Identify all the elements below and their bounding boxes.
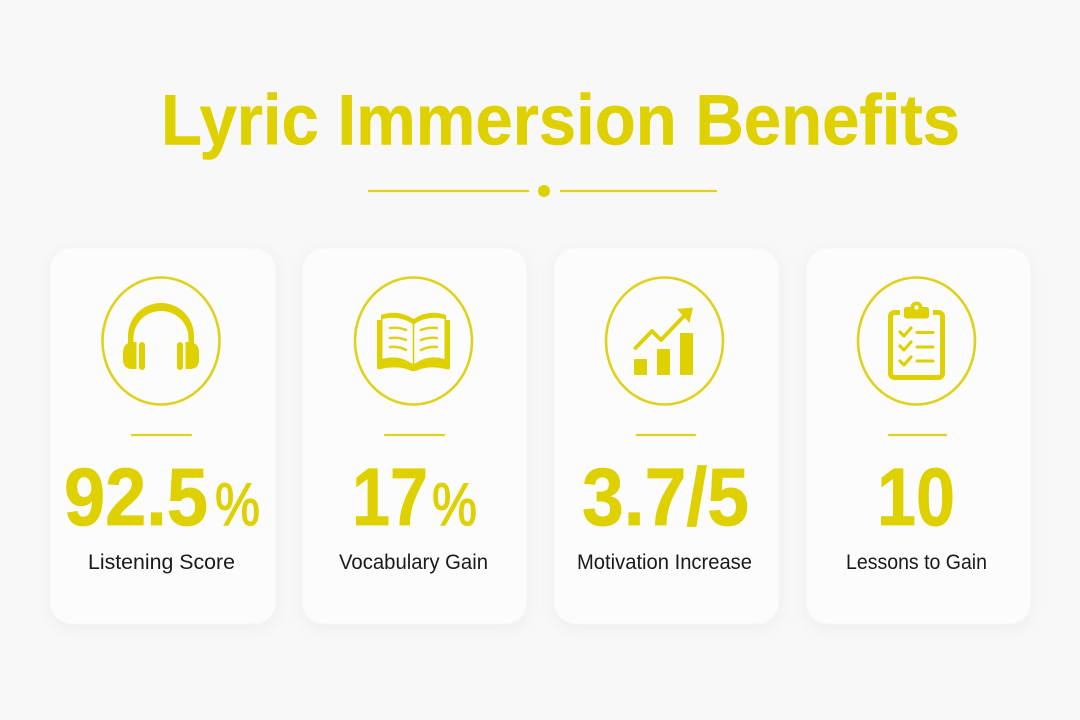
panel: listening score: [50, 248, 276, 624]
label: listening score: Listening Score: [88, 550, 235, 574]
label: motivation increase: Motivation Increase: [577, 550, 752, 574]
label: vocabulary gain: Vocabulary Gain: [339, 550, 488, 574]
stat: 10: 10: [877, 452, 955, 543]
stat: 92.5%: 92.5: [64, 452, 208, 543]
panel: vocabulary gain: %: [432, 471, 477, 538]
icon: headphones: [102, 278, 220, 404]
panel: listening score: %: [215, 471, 260, 538]
icon: open book: [355, 278, 472, 404]
title divider: [369, 185, 716, 197]
icon: clipboard checklist: [858, 278, 975, 404]
title: Lyric Immersion Benefits: [161, 82, 960, 160]
icon: rising bar chart: [606, 278, 723, 404]
stat: 3.7/5: 3.7/5: [582, 452, 749, 543]
panel: vocabulary gain: [302, 248, 527, 624]
label: lessons to gain: Lessons to Gain: [846, 550, 987, 574]
stat: 17%: 17: [352, 452, 428, 543]
panel: motivation increase: [554, 248, 779, 624]
panel: lessons to gain: [806, 248, 1031, 624]
